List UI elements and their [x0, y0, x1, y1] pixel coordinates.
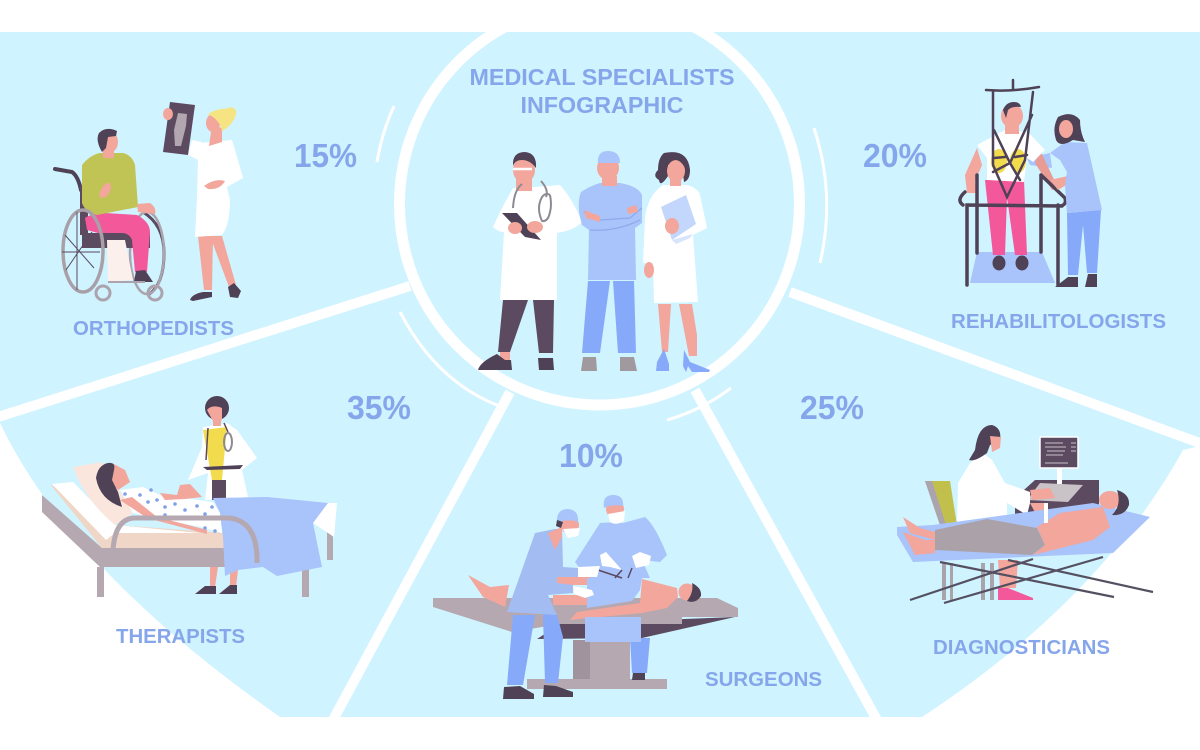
illustration: central surgeon [579, 151, 642, 371]
title [470, 64, 734, 118]
percentage: rehabilitologists 20%: 20% [863, 137, 927, 174]
percentage: diagnosticians 25%: 25% [800, 389, 864, 426]
title: MEDICAL SPECIALISTS [470, 64, 734, 90]
percentage: surgeons 10%: 10% [559, 437, 623, 474]
label: therapists: THERAPISTS [116, 626, 245, 648]
illustration: central doctor with folder [643, 152, 710, 372]
illustration: therapist doctor [188, 396, 257, 594]
illustration: rehabilitation sling and treadmill [960, 80, 1068, 285]
label: rehabilitologists: REHABILITOLOGISTS [951, 311, 1166, 333]
illustration: front surgeon [503, 509, 600, 699]
percentage: orthopedists 15%: 15% [294, 137, 357, 174]
illustration: bed blanket and rail [113, 497, 337, 576]
illustration: back surgeon and patient [468, 495, 701, 680]
illustration: rehabilitologist [1050, 114, 1102, 287]
illustration: ultrasound console [1015, 437, 1099, 515]
illustration: patient on hospital bed [42, 462, 333, 597]
label: surgeons: SURGEONS [705, 669, 822, 691]
illustration: operating table [433, 598, 738, 689]
illustration: diagnostician [925, 425, 1055, 600]
illustration: patient on couch [897, 490, 1153, 603]
label: orthopedists: ORTHOPEDISTS [73, 318, 234, 340]
percentage: therapists 35%: 35% [347, 389, 411, 426]
title: INFOGRAPHIC [520, 92, 684, 118]
illustration: orthopedist with x-ray [163, 102, 243, 301]
illustration: central doctor with clipboard [478, 152, 582, 370]
illustration: patient in wheelchair [55, 129, 164, 300]
label: diagnosticians: DIAGNOSTICIANS [933, 637, 1110, 659]
